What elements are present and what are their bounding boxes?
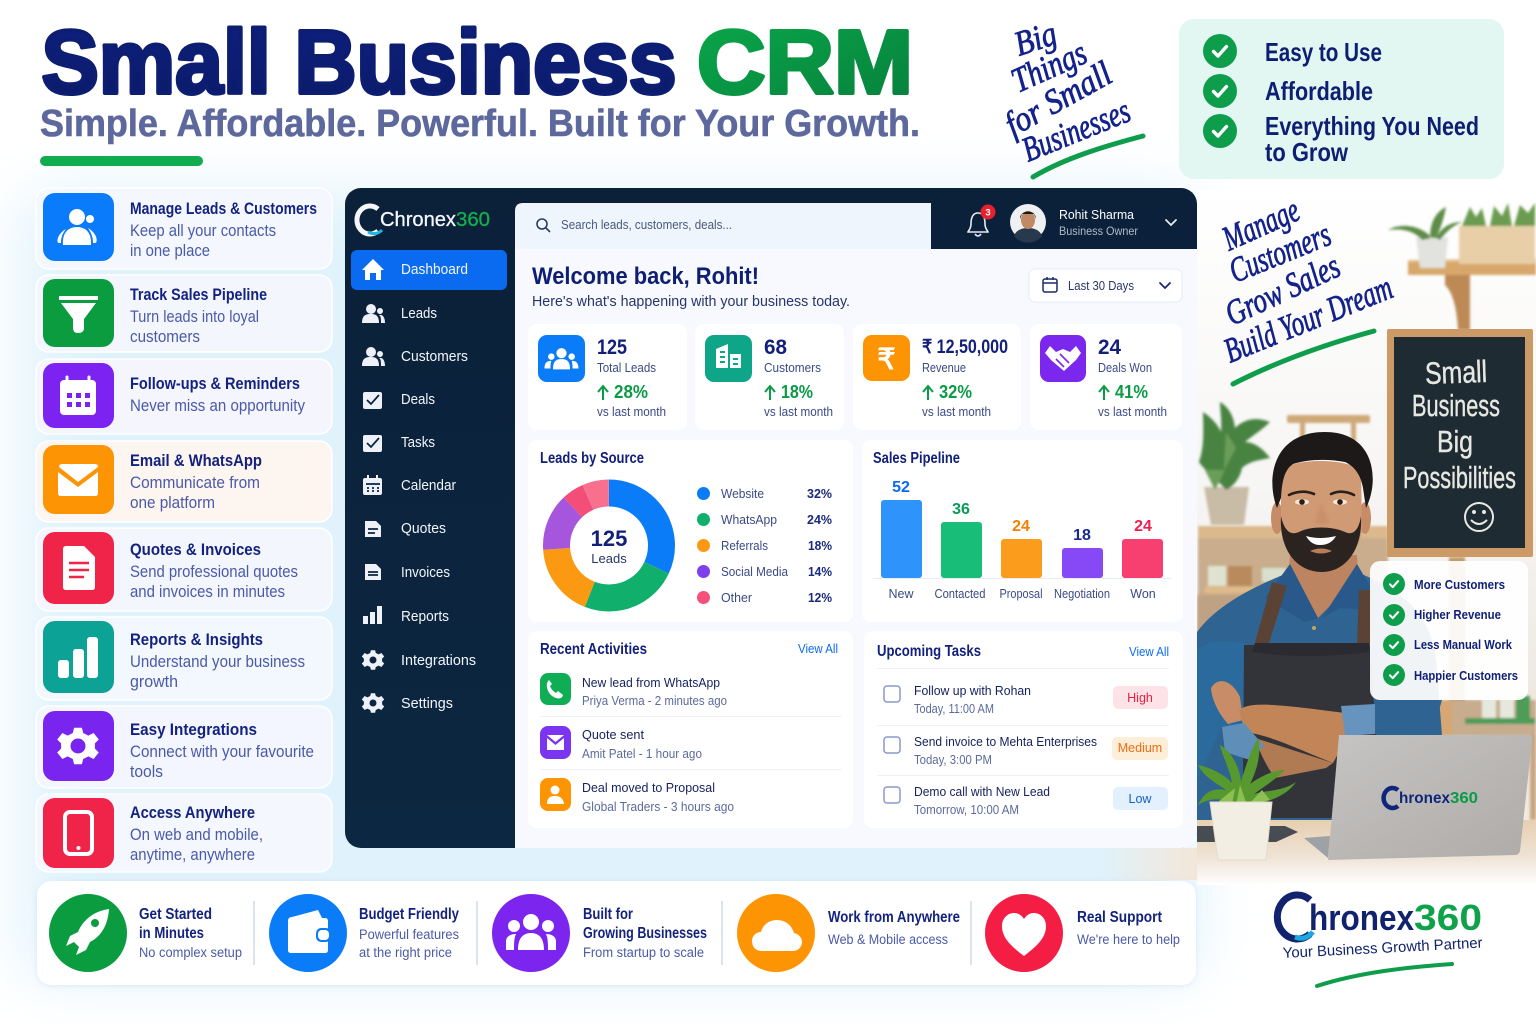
chalk text <box>1403 354 1516 495</box>
welcome heading: Welcome back, Rohit! <box>532 263 759 290</box>
feature: follow-ups <box>36 359 332 434</box>
nose <box>1315 503 1329 524</box>
feature: reports: growth <box>130 673 178 691</box>
feature: email whatsapp: Email & WhatsApp <box>130 451 262 470</box>
laptop logo <box>1384 788 1478 808</box>
legend <box>697 487 832 605</box>
benefit: real support: We're here to help <box>1077 932 1180 947</box>
benefits card over photo: More Customers <box>1414 578 1505 592</box>
stat card: total leads: 28% <box>614 382 648 402</box>
table <box>1197 820 1536 885</box>
activity: quote <box>540 726 702 761</box>
bar chart: Negotiation <box>1054 587 1110 601</box>
nav labels: Settings <box>401 696 453 712</box>
stat card: customers: Customers <box>764 361 821 375</box>
bottom benefits bar <box>37 881 1196 985</box>
feature: sales pipeline <box>36 275 332 352</box>
activity: whatsapp: New lead from WhatsApp <box>582 675 720 690</box>
legend: 12% <box>808 591 832 605</box>
stat card: deals won: vs last month <box>1098 405 1167 419</box>
feature: quotes: and invoices in minutes <box>130 583 285 601</box>
legend: 14% <box>808 565 832 579</box>
eyebrows <box>1289 492 1354 495</box>
nav labels: Integrations <box>401 653 476 669</box>
table fade <box>1100 848 1197 880</box>
task: demo: Demo call with New Lead <box>914 784 1050 799</box>
legend: WhatsApp <box>721 513 777 527</box>
laptop logo: hronex <box>1399 790 1450 807</box>
feature: email whatsapp <box>36 441 332 522</box>
stat card: deals won: 41% <box>1115 382 1148 402</box>
handwritten slogan: big things: Things <box>1005 33 1093 100</box>
chalk text: Small <box>1424 354 1488 391</box>
benefit: built for growing: Growing Businesses <box>583 925 707 942</box>
benefit: work from anywhere: Web & Mobile access <box>828 932 948 947</box>
person <box>1197 432 1442 820</box>
legend: Website <box>721 487 764 501</box>
panel: upcoming tasks: View All <box>1129 645 1169 659</box>
right photo scene <box>1100 190 1536 885</box>
feature: quotes <box>36 528 332 611</box>
sidebar logo: 360 <box>456 209 490 231</box>
legend: 32% <box>807 487 832 501</box>
legend: Social Media <box>721 565 788 579</box>
sidebar navigation <box>351 250 507 713</box>
nav labels: Calendar <box>401 478 456 494</box>
benefits top panel <box>1179 19 1504 179</box>
benefit: get started <box>49 894 242 972</box>
benefit: work from anywhere: Work from Anywhere <box>828 909 960 926</box>
check icons <box>1203 34 1237 148</box>
legend: 18% <box>808 539 832 553</box>
nav labels: Reports <box>401 609 449 625</box>
nav labels <box>401 262 476 712</box>
subtitle: Simple. Affordable. Powerful. Built for Your Growth. <box>40 103 920 145</box>
handwritten slogan: manage customers <box>1216 190 1398 384</box>
title: Small Business <box>42 13 676 113</box>
sidebar logo: Chronex <box>380 209 456 231</box>
stat card: customers: vs last month <box>764 405 833 419</box>
benefit: get started: Get Started <box>139 906 212 923</box>
stat card: revenue <box>853 324 1021 430</box>
date range selector: Last 30 Days <box>1068 279 1134 293</box>
bar chart: 24 <box>1134 518 1152 535</box>
benefit: work from anywhere <box>737 894 960 972</box>
panel: recent activities: Recent Activities <box>540 641 647 658</box>
brand logo <box>1277 895 1483 986</box>
benefit texts <box>1265 37 1479 167</box>
handwritten slogan: manage customers: Build Your Dream <box>1218 268 1398 370</box>
benefit: real support <box>985 894 1180 972</box>
panel: recent activities <box>528 631 853 828</box>
bar chart: Won <box>1130 587 1156 601</box>
feature: reports <box>36 617 332 700</box>
feature: integrations: Connect with your favourite <box>130 743 314 761</box>
benefit: built for growing <box>492 894 707 972</box>
benefit texts: Everything You Need <box>1265 111 1479 141</box>
activity: whatsapp <box>540 673 727 708</box>
search bar <box>515 203 931 249</box>
benefit: get started: No complex setup <box>139 945 242 960</box>
user profile <box>1010 204 1176 243</box>
handwritten slogan: manage customers: Customers <box>1223 215 1336 290</box>
back shelves <box>1197 415 1536 820</box>
nav labels: Deals <box>401 392 435 408</box>
feature: sales pipeline: Turn leads into loyal <box>130 308 259 326</box>
feature: sales pipeline: customers <box>130 328 200 346</box>
feature: integrations <box>36 706 332 788</box>
benefits card over photo: Less Manual Work <box>1414 638 1512 652</box>
feature: quotes: Quotes & Invoices <box>130 540 261 559</box>
stat card: deals won <box>1030 324 1182 430</box>
feature: anywhere: Access Anywhere <box>130 803 255 822</box>
background glow <box>20 190 1200 980</box>
feature: manage leads <box>36 188 332 269</box>
stat card: deals won: Deals Won <box>1098 361 1152 375</box>
task: demo <box>884 784 1168 817</box>
task: demo: Low <box>1129 792 1152 806</box>
benefit: built for growing: Built for <box>583 906 633 923</box>
activity: quote: Quote sent <box>582 727 644 742</box>
shirt <box>1197 572 1442 820</box>
nav labels: Dashboard <box>401 262 468 278</box>
notifications bell <box>968 204 996 236</box>
benefit: budget friendly <box>269 894 459 972</box>
panel: sales pipeline <box>862 440 1183 622</box>
title underline <box>40 156 203 166</box>
task: demo: Tomorrow, 10:00 AM <box>914 803 1019 817</box>
dashboard <box>345 188 1197 848</box>
laptop logo: 360 <box>1450 790 1478 807</box>
smiley <box>1465 503 1493 531</box>
feature list panel <box>36 188 332 872</box>
donut center label: Leads <box>591 551 627 566</box>
legend: Other <box>721 591 752 605</box>
nav labels: Quotes <box>401 521 446 537</box>
benefit: get started: in Minutes <box>139 925 204 942</box>
activity: deal <box>540 778 734 814</box>
handwritten slogan: manage customers: Manage <box>1216 190 1305 259</box>
notifications bell: 3 <box>985 208 991 218</box>
nav icons <box>362 259 385 713</box>
stat card: customers <box>695 324 844 430</box>
stat card: deals won: 24 <box>1098 336 1121 359</box>
feature: manage leads: Manage Leads & Customers <box>130 199 317 218</box>
benefit: budget friendly: Powerful features <box>359 927 459 942</box>
bar chart: Contacted <box>934 587 986 601</box>
benefits card over photo: Happier Customers <box>1414 669 1518 683</box>
panel: upcoming tasks <box>864 631 1183 828</box>
stat card: revenue: vs last month <box>922 405 991 419</box>
neck <box>1288 555 1358 618</box>
task: invoice: Medium <box>1118 741 1162 755</box>
brand logo: hronex <box>1309 897 1414 938</box>
feature: anywhere <box>36 794 332 872</box>
hair <box>1272 432 1373 508</box>
bar chart: New <box>888 587 914 601</box>
search bar: Search leads, customers, deals... <box>561 218 732 232</box>
feature: quotes: Send professional quotes <box>130 563 298 581</box>
task: invoice <box>884 734 1168 767</box>
feature: integrations: tools <box>130 763 163 781</box>
feature: sales pipeline: Track Sales Pipeline <box>130 285 267 304</box>
feature: integrations: Easy Integrations <box>130 720 257 739</box>
bar chart: 36 <box>952 501 970 518</box>
stat card: revenue: 32% <box>939 382 972 402</box>
feature: anywhere: anytime, anywhere <box>130 846 255 864</box>
feature: email whatsapp: Communicate from <box>130 474 260 492</box>
benefit texts: Affordable <box>1265 76 1373 106</box>
activity: deal: Global Traders - 3 hours ago <box>582 800 734 814</box>
panel: sales pipeline: Sales Pipeline <box>873 450 960 467</box>
stat card: customers: 68 <box>764 336 787 359</box>
benefit: budget friendly: Budget Friendly <box>359 906 459 923</box>
brand logo: 360 <box>1414 897 1482 938</box>
donut center label: 125 <box>591 526 627 551</box>
benefits card over photo: Higher Revenue <box>1414 608 1501 622</box>
collar <box>1265 564 1370 622</box>
panel: upcoming tasks: Upcoming Tasks <box>877 643 981 660</box>
bar chart: 18 <box>1073 527 1091 544</box>
feature: anywhere: On web and mobile, <box>130 826 263 844</box>
stat card: total leads <box>528 324 687 430</box>
donut center label <box>591 526 627 566</box>
benefit texts: to Grow <box>1265 137 1349 167</box>
task: follow up <box>884 683 1168 716</box>
tablet <box>1197 826 1298 842</box>
chalk text: Business <box>1412 388 1500 423</box>
feature: manage leads: Keep all your contacts <box>130 222 276 240</box>
brand swoosh <box>1317 964 1452 986</box>
handwritten slogan: big things: Businesses <box>1016 91 1136 169</box>
handwritten slogan: big things: Big <box>1009 14 1061 64</box>
benefit texts: Easy to Use <box>1265 37 1382 67</box>
apron <box>1243 645 1376 818</box>
eyes <box>1295 499 1347 505</box>
stat card: customers: 18% <box>781 382 813 402</box>
stat card: revenue: ₹ <box>877 344 896 376</box>
feature: reports: Reports & Insights <box>130 630 263 649</box>
feature: reports: Understand your business <box>130 653 305 671</box>
feature: follow-ups: Follow-ups & Reminders <box>130 374 300 393</box>
handwritten slogan: big things: for Small <box>998 54 1118 144</box>
laptop <box>1304 735 1532 860</box>
nav labels: Tasks <box>401 435 435 451</box>
panel: recent activities: View All <box>798 642 838 656</box>
welcome subheading: Here's what's happening with your business today. <box>532 293 850 310</box>
nav labels: Leads <box>401 306 437 322</box>
hand and arms <box>1211 681 1243 724</box>
task: follow up: Follow up with Rohan <box>914 683 1031 698</box>
task: invoice: Send invoice to Mehta Enterprises <box>914 734 1097 749</box>
nav labels: Customers <box>401 349 468 365</box>
bar chart: 24 <box>1012 518 1030 535</box>
activity: quote: Amit Patel - 1 hour ago <box>582 747 702 761</box>
nav labels: Invoices <box>401 565 450 581</box>
stat card: revenue: ₹ 12,50,000 <box>922 337 1008 358</box>
face <box>1281 461 1362 572</box>
bar chart: Proposal <box>1000 587 1042 601</box>
bar chart: 52 <box>892 479 910 496</box>
stat card: total leads: 125 <box>597 336 627 359</box>
beard <box>1281 516 1361 572</box>
front plant <box>1198 738 1296 860</box>
chalk text: Big <box>1437 424 1473 459</box>
task: follow up: Today, 11:00 AM <box>914 702 994 716</box>
donut chart <box>556 493 662 598</box>
panel: leads by source: Leads by Source <box>540 450 644 467</box>
feature: manage leads: in one place <box>130 242 210 260</box>
date range selector <box>1029 269 1182 302</box>
activity: deal: Deal moved to Proposal <box>582 780 715 795</box>
handwritten slogan: big things <box>998 14 1143 177</box>
bar chart <box>873 479 1171 601</box>
benefits card over photo <box>1370 561 1528 700</box>
user profile: Rohit Sharma <box>1059 207 1135 222</box>
stat card: revenue: Revenue <box>922 361 966 375</box>
ears <box>1271 502 1283 534</box>
handwritten slogan: manage customers: Grow Sales <box>1219 246 1346 333</box>
feature: email whatsapp: one platform <box>130 494 215 512</box>
activity: whatsapp: Priya Verma - 2 minutes ago <box>582 694 727 708</box>
stat card: total leads: Total Leads <box>597 361 656 375</box>
top shelf with plants <box>1388 203 1536 330</box>
legend: 24% <box>807 513 832 527</box>
left plant <box>1199 402 1270 525</box>
brand tagline: Your Business Growth Partner <box>1282 935 1483 962</box>
task: follow up: High <box>1127 691 1153 705</box>
sidebar logo <box>357 206 490 234</box>
benefit: built for growing: From startup to scale <box>583 945 704 960</box>
benefit: budget friendly: at the right price <box>359 945 452 960</box>
benefit: real support: Real Support <box>1077 909 1162 926</box>
user profile: Business Owner <box>1059 226 1138 238</box>
chalkboard <box>1387 329 1533 557</box>
legend: Referrals <box>721 539 768 553</box>
stat card: total leads: vs last month <box>597 405 666 419</box>
title: CRM <box>697 13 913 113</box>
feature: follow-ups: Never miss an opportunity <box>130 397 306 415</box>
task: invoice: Today, 3:00 PM <box>914 753 992 767</box>
panel: leads by source <box>528 440 853 622</box>
